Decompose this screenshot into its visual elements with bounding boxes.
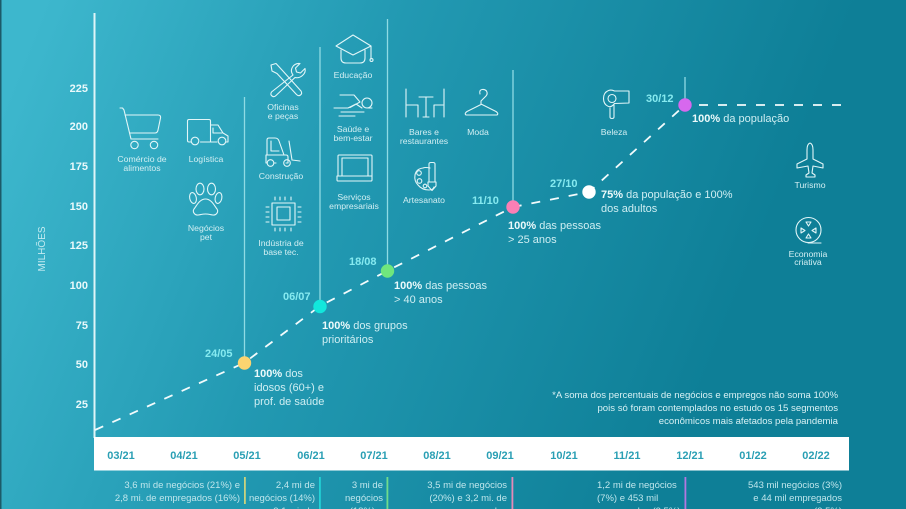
icon: chip, indústria de base tec.: base tec.: [263, 247, 299, 257]
milestone 27/10: 27/10: [550, 178, 578, 190]
period note: jul-ago: negócios: [345, 493, 383, 504]
milestone 24/05: prof. de saúde: [254, 396, 324, 408]
icon: graduation cap, educação: Educação: [334, 70, 372, 80]
icon: truck, logística: [188, 120, 228, 164]
icon: plane, turismo: [794, 143, 826, 190]
milestone 06/07: prioritários: [322, 334, 374, 346]
period note: out-dez: 1,2 mi de negócios: [597, 480, 677, 491]
timeline month bar: 09/21: [486, 450, 514, 462]
icon: film reel, economia criativa: Economia: [789, 249, 827, 259]
timeline month bar: 06/21: [297, 450, 325, 462]
icon: laptop, serviços empresariais: [329, 155, 380, 211]
icon: table and chairs, bares e restaurantes: [400, 89, 449, 146]
period note: ago-out: (20%) e 3,2 mi. de: [429, 493, 507, 504]
footnote: *A soma dos percentuais de negócios e empregos não soma 100%: [552, 390, 838, 401]
icon: tools, oficinas e peças: e peças: [268, 111, 299, 121]
icon: swimmer, saúde e bem-estar: Saúde e: [337, 124, 369, 134]
timeline month bar: 04/21: [170, 450, 198, 462]
timeline month bar: [94, 437, 849, 470]
y axis: 25: [76, 399, 88, 411]
milestone 06/07: 100% dos grupos: [322, 320, 408, 332]
milestone 30/12: [646, 93, 789, 125]
icon: swimmer, saúde e bem-estar: bem-estar: [333, 133, 373, 143]
icon: hanger, moda: Moda: [467, 127, 489, 137]
y axis: 150: [70, 201, 88, 213]
footnote: pois só foram contemplados no estudo os 15 segmentos: [597, 403, 838, 414]
icon: laptop, serviços empresariais: Serviços: [337, 192, 371, 202]
milestone 30/12: 30/12: [646, 93, 674, 105]
milestone 18/08: 18/08: [349, 256, 377, 268]
milestone 27/10: 75% da população e 100%: [601, 189, 733, 201]
milestone 27/10: [550, 178, 733, 215]
period note: mai-jul: negócios (14%): [249, 493, 315, 504]
icon: tools, oficinas e peças: Oficinas: [267, 102, 299, 112]
icon: film reel, economia criativa: [789, 218, 827, 267]
milestone 11/10: [472, 195, 601, 246]
icon: palette, artesanato: Artesanato: [403, 195, 445, 205]
icon: cart, comércio de alimentos: alimentos: [123, 163, 161, 173]
timeline month bar: 07/21: [360, 450, 388, 462]
timeline month bar: 11/21: [614, 450, 640, 462]
icon: cart, comércio de alimentos: Comércio de: [117, 154, 167, 164]
period note: dez-fev: e 44 mil empregados: [753, 493, 842, 504]
icon: chip, indústria de base tec.: Indústria de: [258, 238, 304, 248]
icon: swimmer, saúde e bem-estar: [333, 95, 373, 143]
y axis: [70, 13, 94, 438]
period note: mar-mai: 2,8 mi. de empregados (16%): [115, 493, 240, 504]
icon: plane, turismo: Turismo: [794, 180, 826, 190]
timeline month bar: 10/21: [550, 450, 578, 462]
milestone 30/12: 100% da população: [692, 113, 789, 125]
timeline month bar: 02/22: [802, 450, 830, 462]
y axis: 200: [70, 121, 88, 133]
icon: cart, comércio de alimentos: [117, 108, 167, 173]
icon: table and chairs, bares e restaurantes: restaurantes: [400, 136, 449, 146]
icon: laptop, serviços empresariais: empresariais: [329, 201, 380, 211]
icon: forklift, construção: Construção: [259, 171, 303, 181]
y axis: 50: [76, 359, 88, 371]
period note: out-dez: [597, 477, 686, 509]
icon: film reel, economia criativa: criativa: [794, 257, 822, 267]
period note: ago-out: [427, 477, 513, 509]
y axis title: MILHÕES: [35, 226, 48, 272]
milestone 06/07: [283, 291, 408, 346]
period note: jul-ago: [345, 477, 388, 509]
timeline month bar: 03/21: [107, 450, 135, 462]
icon: forklift, construção: [259, 138, 303, 181]
milestone 11/10: 11/10: [472, 195, 499, 207]
period note: out-dez: (7%) e 453 mil: [597, 493, 658, 504]
period note: ago-out: 3,5 mi de negócios: [427, 480, 507, 491]
milestone 06/07: 06/07: [283, 291, 311, 303]
icon: paw, negócios pet: Negócios: [188, 223, 225, 233]
milestone 11/10: 100% das pessoas: [508, 220, 601, 232]
period note: dez-fev: [748, 480, 842, 509]
period note: mai-jul: [249, 477, 321, 509]
milestone 18/08: 100% das pessoas: [394, 280, 487, 292]
milestone 24/05: 24/05: [205, 348, 233, 360]
y axis: 125: [70, 240, 88, 252]
y axis: 225: [70, 83, 88, 95]
icon: dryer, beleza: [601, 90, 629, 137]
timeline month bar: 05/21: [233, 450, 261, 462]
icon: truck, logística: Logística: [189, 154, 224, 164]
y axis: 75: [76, 320, 88, 332]
icon: graduation cap, educação: [334, 35, 373, 80]
icon: paw, negócios pet: pet: [200, 232, 213, 242]
dashed vaccination curve: [95, 105, 850, 430]
timeline month bar: 01/22: [739, 450, 767, 462]
icon: tools, oficinas e peças: [267, 63, 305, 121]
milestone 27/10: dos adultos: [601, 203, 658, 215]
icon: table and chairs, bares e restaurantes: Bares e: [409, 127, 439, 137]
timeline month bar: 08/21: [423, 450, 451, 462]
icon: chip, indústria de base tec.: [258, 197, 304, 257]
period note: mar-mai: 3,6 mi de negócios (21%) e: [124, 480, 240, 491]
milestone 18/08: [349, 256, 487, 306]
y axis: 175: [70, 161, 88, 173]
milestone stems: [244, 19, 685, 363]
period note: mar-mai: [115, 477, 246, 504]
y axis: 100: [70, 280, 88, 292]
period note: dez-fev: 543 mil negócios (3%): [748, 480, 842, 491]
milestone 24/05: [205, 348, 324, 408]
timeline month bar: 12/21: [676, 450, 704, 462]
milestone 11/10: > 25 anos: [508, 234, 557, 246]
milestone 24/05: idosos (60+) e: [254, 382, 324, 394]
milestone 24/05: 100% dos: [254, 368, 303, 380]
icon: palette, artesanato: [403, 162, 445, 205]
period note: mai-jul: 2,4 mi de: [276, 480, 315, 491]
icon: hanger, moda: [465, 89, 498, 137]
period note: jul-ago: 3 mi de: [352, 480, 383, 491]
milestone 18/08: > 40 anos: [394, 294, 443, 306]
footnote: econômicos mais afetados pela pandemia: [659, 416, 839, 427]
icon: dryer, beleza: Beleza: [601, 127, 627, 137]
icon: paw, negócios pet: [188, 183, 225, 242]
footnote: [552, 390, 839, 427]
